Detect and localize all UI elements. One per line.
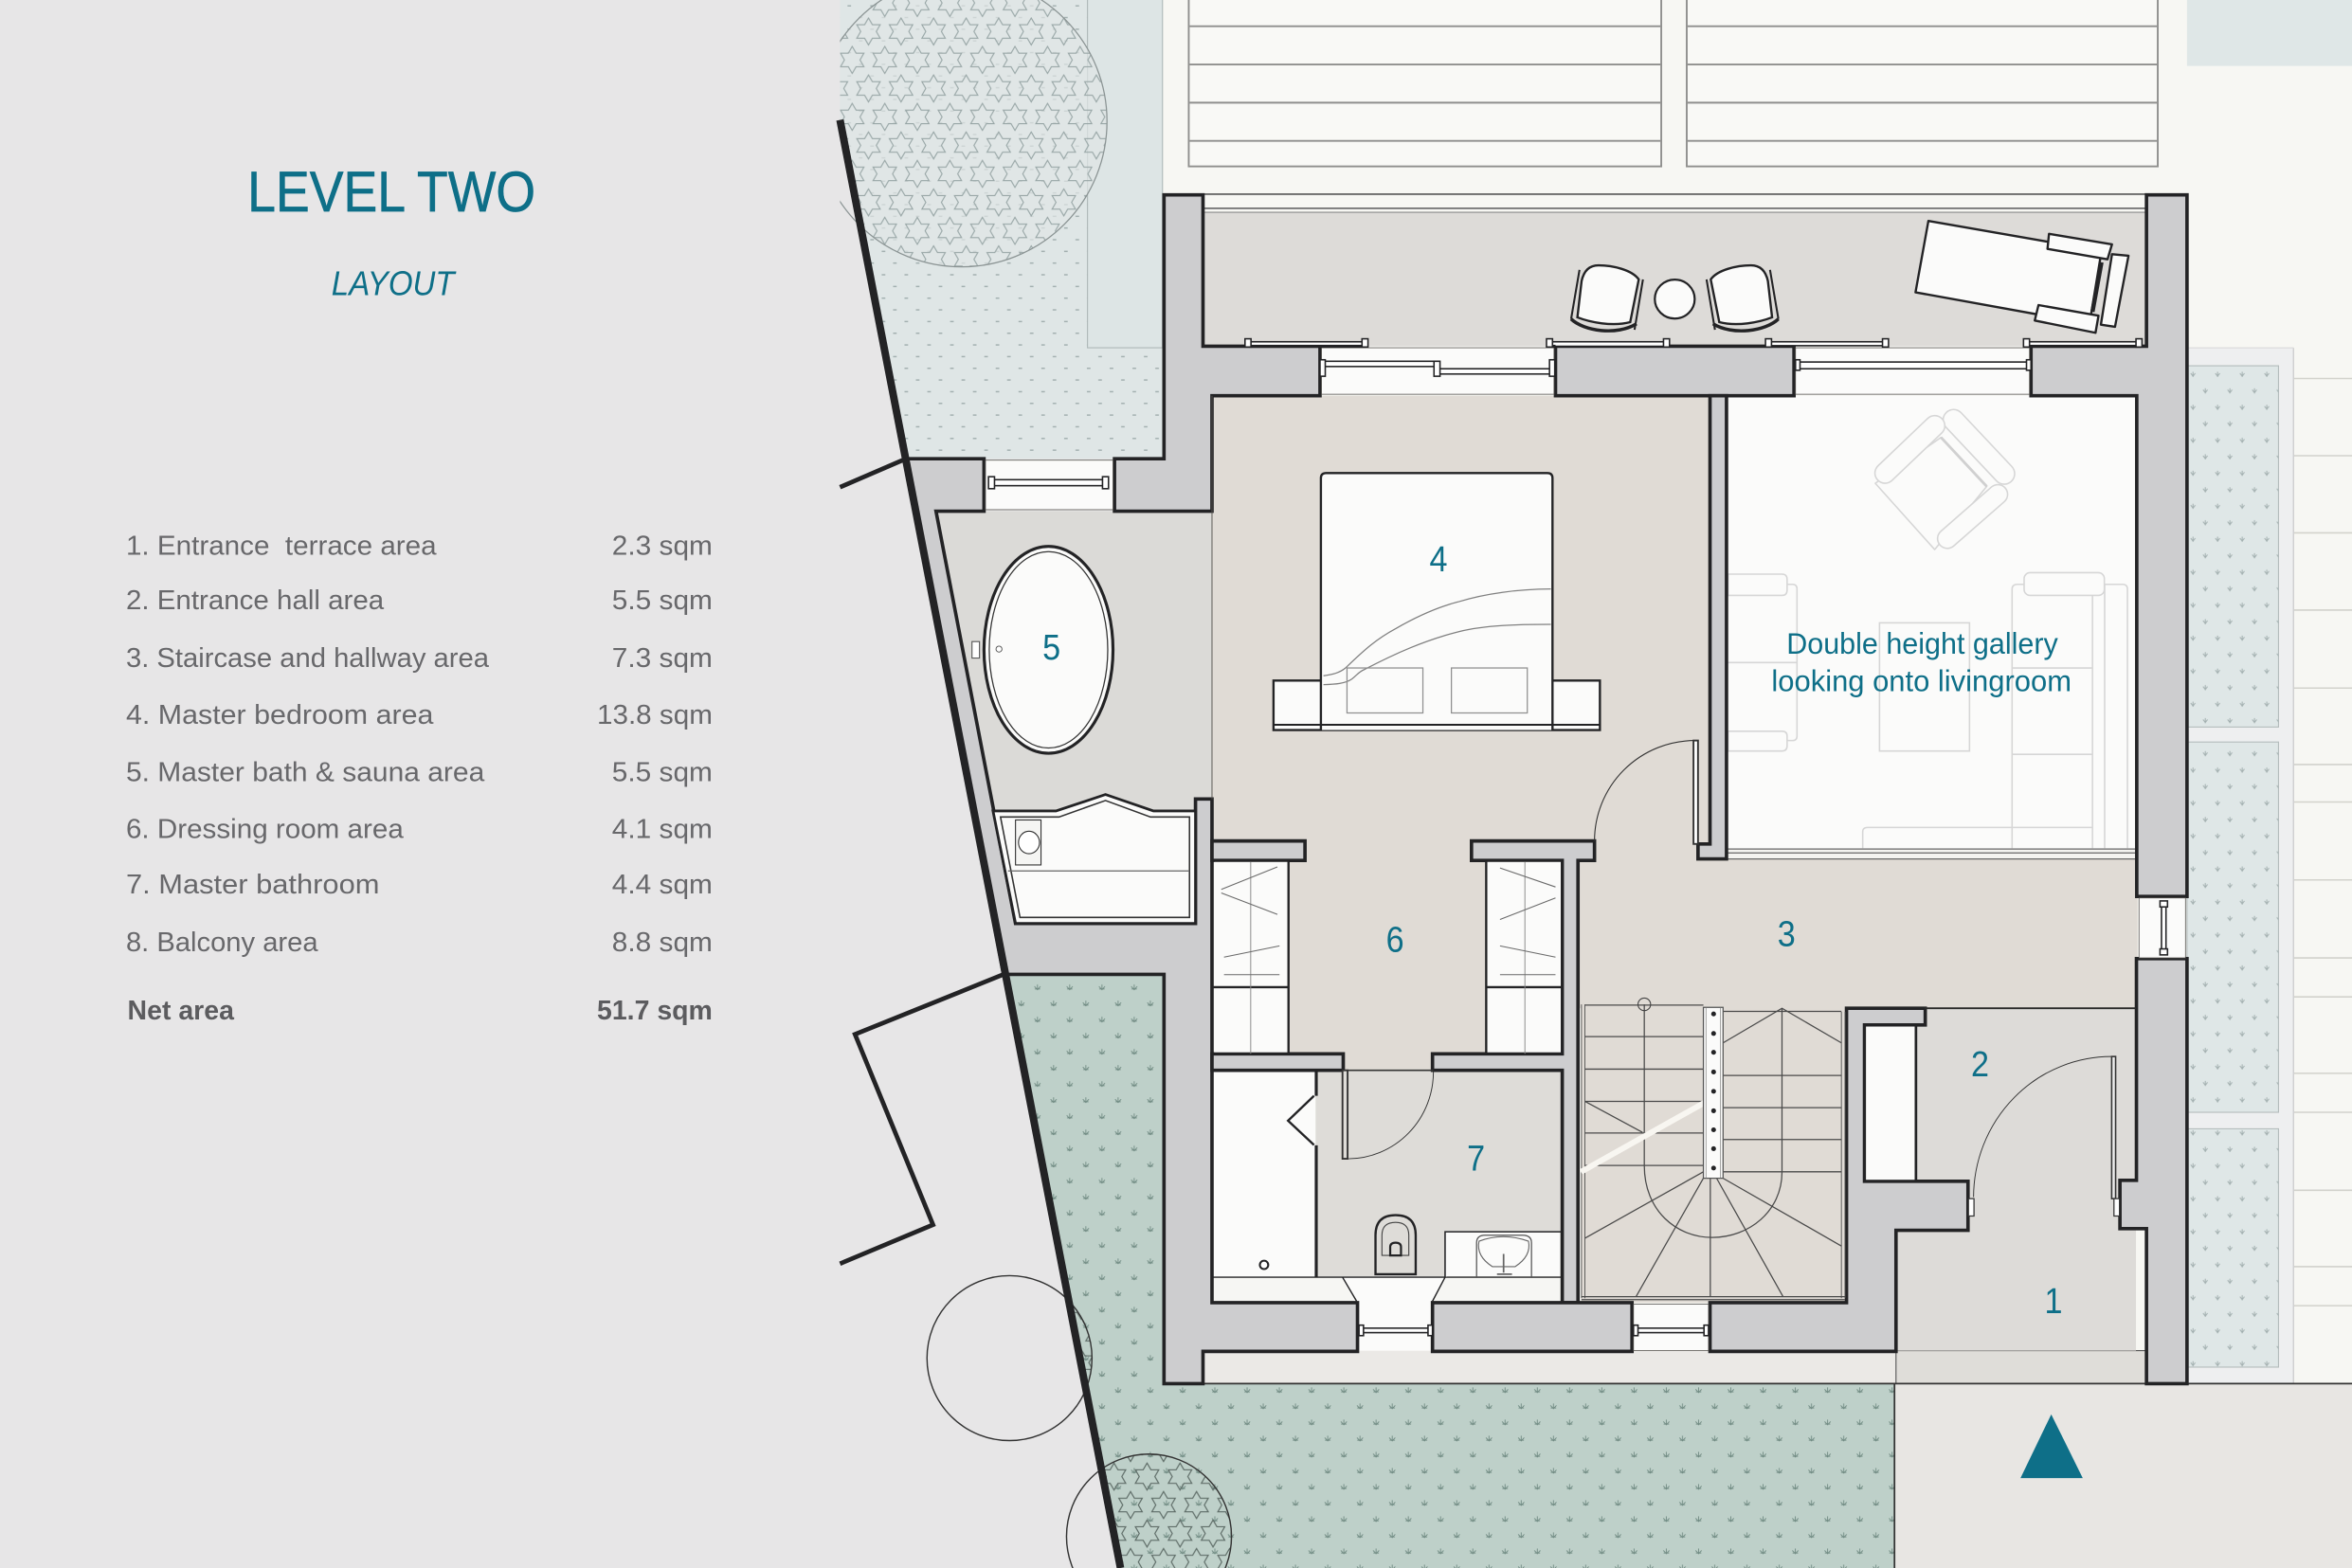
left sofa xyxy=(1728,574,1797,751)
wall: south east and closet xyxy=(1710,1008,1968,1351)
title: LEVEL TWO xyxy=(247,160,535,224)
row 7: 7. Master bathroom xyxy=(126,870,379,900)
side strips xyxy=(1582,1004,1845,1298)
wall: west xyxy=(906,459,1358,1383)
bed xyxy=(1274,473,1600,730)
bathroom whites xyxy=(1212,1071,1562,1351)
treads xyxy=(1585,1005,1841,1172)
row 5: 5.5 sqm xyxy=(612,757,713,787)
bathroom window xyxy=(1359,1325,1433,1336)
gallery note: looking onto livingroom xyxy=(1771,663,2072,697)
row 4: 13.8 sqm xyxy=(597,700,713,730)
room number 5: 5 xyxy=(1042,628,1060,668)
bedroom window xyxy=(1320,360,1555,376)
net area total xyxy=(128,996,713,1026)
wall: closet right and stair xyxy=(1433,841,1595,1303)
sliding windows xyxy=(988,339,2167,1336)
row 3: 3. Staircase and hallway area xyxy=(126,643,489,674)
wall: south centre xyxy=(1433,1303,1632,1351)
garden bottom xyxy=(927,974,1894,1568)
row 5 xyxy=(126,757,713,787)
shower partition xyxy=(1288,1071,1316,1277)
garden top left xyxy=(816,0,1163,459)
area schedule xyxy=(126,531,713,1026)
tree outlines xyxy=(927,1275,1232,1568)
sun lounger xyxy=(1915,221,2128,333)
balcony floor xyxy=(1203,194,2146,346)
surrounding site off-white xyxy=(1163,0,2352,1383)
boundary and exterior lines xyxy=(840,120,1120,1568)
entrance hall floor xyxy=(1848,1008,2136,1351)
bathroom door xyxy=(1343,1071,1434,1159)
table xyxy=(1655,279,1694,318)
handrail xyxy=(1581,1097,1713,1172)
hall closet white xyxy=(1866,1025,1916,1181)
row 3 xyxy=(126,643,713,674)
bathroom fixtures xyxy=(1259,1071,1562,1277)
wall: east lower xyxy=(2120,959,2187,1383)
master bathroom floor xyxy=(1315,1071,1562,1277)
chair right xyxy=(1707,265,1779,331)
entrance forecourt xyxy=(1894,1383,2352,1568)
doors xyxy=(1343,741,2120,1216)
row 4 xyxy=(126,700,713,730)
gallery furniture xyxy=(1728,420,2127,848)
room number 3: 3 xyxy=(1778,914,1796,954)
coffee table xyxy=(1879,622,1969,751)
row 8 xyxy=(126,928,713,958)
sink counter xyxy=(1445,1232,1562,1277)
bath tub xyxy=(972,547,1113,753)
row 5: 5. Master bath & sauna area xyxy=(126,757,484,787)
walls xyxy=(906,195,2187,1383)
bath room floor xyxy=(936,512,1212,974)
toilet xyxy=(1376,1216,1416,1274)
row 8: 8.8 sqm xyxy=(612,928,713,958)
net area total: 51.7 sqm xyxy=(597,996,713,1026)
north arrow xyxy=(2020,1415,2083,1478)
right side boards xyxy=(2187,348,2352,1383)
wall: balcony west xyxy=(1114,195,1320,512)
east window xyxy=(2160,901,2167,955)
spine xyxy=(1704,1007,1723,1179)
entrance terrace strip xyxy=(1203,1351,2148,1383)
pergola slats xyxy=(1188,0,2158,167)
gallery window xyxy=(1796,360,2031,370)
hallway floor xyxy=(1562,839,2138,1008)
stair window xyxy=(1634,1325,1709,1336)
gallery note: Double height gallery xyxy=(1786,626,2058,660)
row 2 xyxy=(126,586,713,616)
entrance door xyxy=(1968,1056,2120,1216)
net area total: Net area xyxy=(128,996,235,1026)
row 3: 7.3 sqm xyxy=(612,643,713,674)
hall thin wall line xyxy=(1925,1007,2136,1009)
row 6: 4.1 sqm xyxy=(612,814,713,844)
wall: balcony centre xyxy=(1555,346,1794,396)
row 2: 5.5 sqm xyxy=(612,586,713,616)
bedroom and dressing floor xyxy=(1212,396,1710,1071)
shower drain xyxy=(1259,1261,1268,1270)
wall: closet left bottom xyxy=(1212,1054,1343,1071)
row 8: 8. Balcony area xyxy=(126,928,318,958)
site line xyxy=(1203,1383,2352,1568)
row 4: 4. Master bedroom area xyxy=(126,700,434,730)
row 6: 6. Dressing room area xyxy=(126,814,404,844)
bath window xyxy=(988,477,1109,489)
right sofa xyxy=(1863,572,2127,848)
room number 1: 1 xyxy=(2045,1282,2062,1322)
wall: closet left top xyxy=(1212,841,1305,860)
room number 2: 2 xyxy=(1971,1045,1989,1085)
stairs floor xyxy=(1581,1004,1848,1303)
gallery note xyxy=(1771,626,2072,697)
row 6 xyxy=(126,814,713,844)
armchair xyxy=(1875,420,2004,550)
room number 4: 4 xyxy=(1430,540,1448,580)
wall: east upper xyxy=(2031,195,2187,896)
row 7: 4.4 sqm xyxy=(612,870,713,900)
row 1 xyxy=(126,531,713,561)
double height gallery void xyxy=(1728,396,2138,859)
chair left xyxy=(1571,265,1643,331)
room number 6: 6 xyxy=(1386,921,1404,961)
row 7 xyxy=(126,870,713,900)
row 1: 1. Entrance terrace area xyxy=(126,531,437,561)
sauna xyxy=(993,795,1196,924)
subtitle: LAYOUT xyxy=(332,264,457,303)
stairs xyxy=(1581,998,1845,1300)
room number 7: 7 xyxy=(1467,1140,1485,1180)
window reveals xyxy=(986,348,2185,1351)
row 1: 2.3 sqm xyxy=(612,531,713,561)
wardrobes xyxy=(1214,860,1562,1054)
balcony door rails xyxy=(1245,339,2142,348)
wall: gallery partition xyxy=(1698,396,1727,859)
top right planting strip xyxy=(2187,0,2352,66)
winders and walk line xyxy=(1582,1004,1845,1300)
right planting beds xyxy=(2187,366,2278,1367)
bedroom door xyxy=(1595,741,1698,844)
balcony furniture xyxy=(1571,221,2128,333)
row 2: 2. Entrance hall area xyxy=(126,586,384,616)
